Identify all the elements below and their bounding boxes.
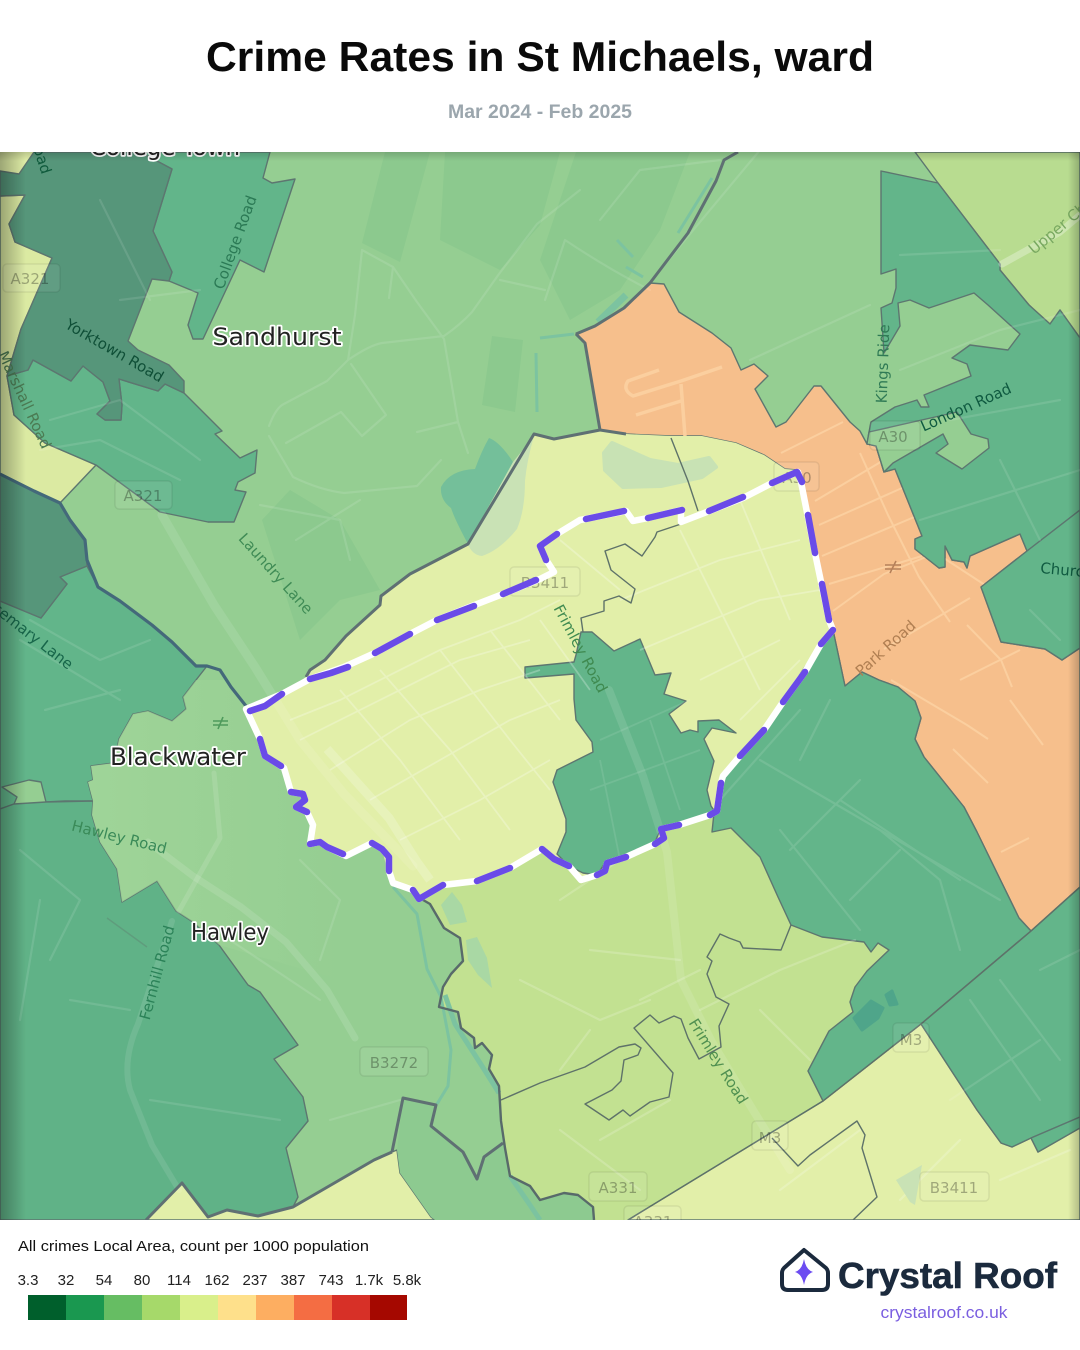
street labels: Frimley Road [550,602,611,696]
place labels [90,133,342,946]
road label shields: A331 [634,1213,672,1231]
roads network [20,150,1080,1200]
subtitle: date range: Mar 2024 - Feb 2025 [448,102,632,123]
legend values: 162 [204,1272,230,1289]
logo wordmark: Crystal Roof [838,1255,1058,1296]
street labels: Park Road [852,617,919,680]
road label shields: A30 [782,469,812,487]
road label shields: B3272 [370,1054,418,1072]
street labels: Road [26,135,55,176]
region: London Road hole [867,412,989,472]
region: dark west [0,474,87,618]
street labels: Fernhill Road [136,924,178,1022]
legend values: 80 [134,1272,150,1289]
road label shields [3,264,989,1235]
place labels: Sandhurst [212,323,342,351]
place labels: Hawley [191,920,269,946]
street labels: Yorktown Road [61,315,167,386]
logo url: crystalroof.co.uk [880,1303,1008,1322]
region: College Road [140,152,295,339]
region: ward green patch [525,632,736,875]
water: north lake [604,443,716,487]
title: Crime Rates in St Michaels, ward [206,33,874,80]
road label shields: A331 [599,1179,637,1197]
region: east medium green [712,630,1031,1101]
logo: Crystal Roof [782,1250,1058,1322]
legend values: 5.8k [393,1272,422,1289]
region: Yorktown dark [0,152,184,420]
road label shields: B3411 [521,574,569,592]
water: lake on pale [468,436,534,556]
ward boundary white line [246,472,833,899]
street labels: College Road [210,193,261,292]
street labels: Hawley Road [70,817,169,858]
region: Church medium green [981,510,1080,660]
legend [18,1238,422,1320]
region: left pale wedge [0,195,96,503]
region: top left pale corner [0,152,34,174]
ward interior roads [290,500,820,880]
river boundary lines [0,474,594,1220]
legend title: All crimes Local Area, count per 1000 population [18,1238,369,1255]
region: south bottom pale [146,1150,435,1220]
legend values: 743 [318,1272,344,1289]
ward boundary purple dashes [250,472,833,899]
region: far south east sliver [1031,1117,1080,1152]
water: ponds south of ward [441,892,492,988]
station icon [885,561,901,573]
street labels: Laundry Lane [235,530,317,618]
stream and river water [393,178,712,1220]
road label shields: A321 [11,270,49,288]
thick boundaries [146,152,738,1220]
water: pond by B3411 [896,1165,922,1205]
region: Blackwater lighter [88,680,220,946]
legend values: 54 [96,1272,112,1289]
street labels: Frimley Road [685,1015,752,1107]
legend colour scale [28,1295,407,1320]
street labels: Kings Ride [873,324,893,404]
region: ward and north pale [246,430,833,897]
place labels: College Town [90,133,240,161]
legend values: 237 [242,1272,268,1289]
place labels: Blackwater [110,743,246,771]
orange area street grid [626,367,1043,852]
region: south east pale [628,1024,1080,1220]
road label shields: A30 [878,428,908,446]
darker parkland patches [192,156,688,662]
region: top right light [915,152,1080,338]
region: Rosemary Lane west [0,566,207,809]
station icon Blackwater [213,717,228,729]
road label shields: B3411 [930,1179,978,1197]
region: river corner green [397,1128,436,1220]
road label shields: A321 [124,487,162,505]
street labels: London Road [918,379,1014,435]
legend values: 3.3 [18,1272,38,1289]
thin internal boundaries [107,438,1080,1220]
water: Sandhurst lake [441,438,513,544]
road label shields: M3 [900,1031,922,1049]
region: south of ward light green [418,813,889,1220]
legend values [18,1272,422,1289]
road label shields: M3 [759,1129,781,1147]
legend values: 114 [167,1272,191,1289]
region: Hawley south west [0,801,308,1220]
legend values: 32 [58,1272,74,1289]
region: north east medium green [867,171,1080,568]
legend values: 387 [280,1272,306,1289]
street labels [0,135,1080,1107]
map edge vignette [0,152,1080,1220]
region: Yorktown lower [7,360,257,522]
icon: house with star [782,1250,828,1290]
water: south east pond [854,991,897,1030]
legend values: 1.7k [355,1272,384,1289]
region: south east medium green [921,887,1080,1147]
region: orange high crime [576,283,1080,931]
